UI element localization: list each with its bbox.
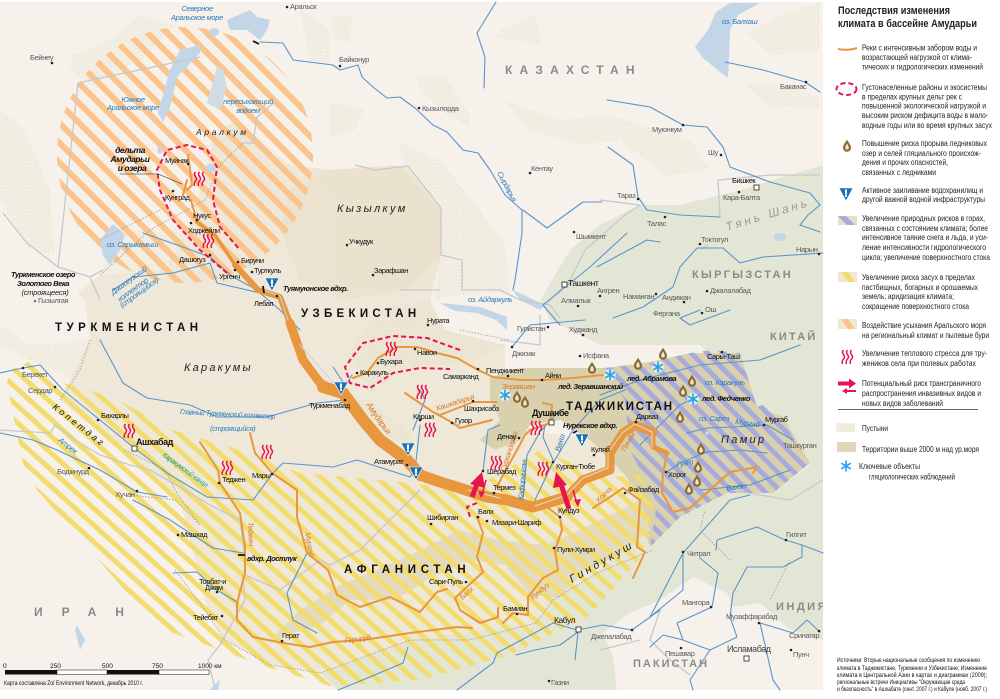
water labels: Мургаб [303,532,316,558]
icons: reservoir siltation shields [238,41,589,555]
sources note [837,656,987,693]
settlements: Байконур [339,55,369,64]
settlements: Ходжейли [188,226,220,235]
hatch: Aral shrinkage impact [57,27,313,283]
settlements: Гузор [455,416,472,425]
settlements: Душанбе [532,408,569,418]
scale bar: 500 [102,663,113,670]
settlements: Газни [551,678,569,687]
water labels: Вахш [553,432,567,453]
water labels: Герируд [344,633,371,645]
bold map notes: Амударьи [110,154,151,164]
country labels: ИРАН [34,605,143,619]
legend: stressed rivers [838,44,983,72]
Amu Darya basin lowland [60,120,653,673]
settlements: Джалалабад [710,286,752,295]
settlements: Герат [282,631,300,640]
country labels [34,63,828,670]
region and range labels: Аралкум [195,127,249,137]
settlements: Пунч [793,650,809,659]
legend title: климата в бассейне Амударьи [838,18,977,30]
settlements: Бухара [380,357,403,366]
settlements: Ургенч [219,272,240,281]
settlements: Гилгит [786,530,807,539]
water labels: Каракумский канал [161,450,211,490]
settlements: Термез [493,483,516,492]
water labels: Зеравшан [502,382,535,391]
settlements: Алмалык [561,296,591,305]
settlements: Андижан [662,293,691,302]
country labels: ТУРКМЕНИСТАН [55,322,203,334]
country labels: ПАКИСТАН [633,658,709,670]
settlements: Нурата [427,316,450,325]
scale bar: 1000 км [198,663,222,670]
legend title [838,5,977,30]
Tejen and Hari rivers [200,442,472,647]
water labels: оз. Балхаш [722,17,759,26]
Kyzylkum darker [280,165,441,300]
settlements: Тейебат [193,613,219,622]
legend: invasive spread: Потенциальный риск трансграничного [862,379,981,388]
icons: heat stress [124,172,549,476]
region and range labels: Памир [721,434,766,446]
invasive species arrows [470,472,581,509]
bold map notes: Нурекское вдхр. [563,421,617,430]
settlements: Кундуз [558,506,580,515]
water labels: Кашкадарья [435,392,475,413]
settlements: Худжанд [569,325,598,334]
water labels: Сырдарья [495,170,519,203]
settlements: Бишкек [732,176,756,185]
Zarafshan river [353,347,603,380]
settlements: Ташкент [568,278,599,288]
settlements: Фергана [653,309,681,318]
settlements: Зарафшан [374,266,408,275]
settlements: Музаффарабад [726,612,778,621]
settlements: Самарканд [443,372,479,381]
settlements: Шахрисабз [464,404,500,413]
settlements: Карши [413,412,434,421]
legend: Aral shrinkage [838,319,989,340]
scale bar: 250 [50,663,61,670]
settlements: Мазари-Шариф [492,518,541,527]
settlements: Атамурат [374,457,404,466]
water labels: Вахан [726,481,747,493]
settlements: Турткуль [254,266,281,275]
legend: glaciological sites: Ключевые объекты [859,462,920,471]
legend: stressed rivers: Реки с интенсивным забором воды и [862,44,977,52]
settlements: Сринагар [789,631,819,640]
icons: glaciological observation sites [499,361,699,405]
green-grey mountains [320,165,823,690]
water labels: Теджен [246,522,256,546]
settlements: Ош [705,305,716,314]
settlements: Боджнурд [57,467,90,476]
legend: populated deltas [836,83,992,130]
legend: invasive spread: новых видов заболеваний [862,399,943,408]
settlements: Джелалабад [591,632,632,641]
water labels: Кокча [594,485,613,504]
settlements: Кучан [116,490,135,499]
Amu Darya main stem [197,222,757,512]
region and range labels [51,127,811,586]
settlements: Курган-Тюбе [556,462,595,471]
legend: high terrain: Территории выше 2000 м над ур.моря [862,445,979,454]
legend title: Последствия изменения [838,5,950,17]
water labels: Аральское море [106,103,159,112]
legend: deserts: Пустыни [862,424,888,433]
water labels: Северное [181,4,213,13]
settlements: Исламабад [727,644,772,654]
stressed rivers [183,155,757,647]
water labels: (строящийся) [210,424,256,433]
lakes [75,3,786,690]
water labels: водоем [236,106,260,115]
water labels: Мургаб [735,417,761,430]
legend: invasive spread [838,378,981,408]
settlements: Шу [708,148,719,157]
country labels: КЫРГЫЗСТАН [692,269,793,281]
settlements: Пенджикент [486,366,525,375]
country labels: КАЗАХСТАН [505,63,642,77]
settlements: Бамиан [503,604,527,613]
scale bar: 0 [3,663,7,670]
settlements: Нукус [193,211,211,220]
water labels: Балх [458,584,476,602]
delta and densely populated risk zones [157,145,477,517]
Amu Darya delta outline [157,145,240,273]
legend: drought: пастбищных, богарных и орошаемых [862,283,978,292]
settlements: Кентау [531,164,553,173]
settlements: Сердар [28,386,52,395]
bold map notes: Золотого Века [17,279,69,288]
settlements: Мургаб [765,415,788,424]
legend: glacial lake outbursts: озер и селей гляциального происхож- [862,149,981,158]
settlements: Лебап [254,299,274,308]
settlements: Ташкурган [783,441,817,450]
hatch: mountain natural risks [604,350,807,545]
settlements: Нарын [796,245,818,254]
region and range labels: Каракумы [184,362,253,374]
region and range labels: Кызылкум [337,203,408,215]
water labels [56,4,761,645]
settlements: Гызылгая [38,296,69,305]
upper Amu Darya delta [183,155,197,222]
legend: heat stress: жеников села при полевых работах [862,359,976,368]
legend: stressed rivers: возрастающей нагрузкой от клима- [862,53,972,62]
Murgab river [250,433,447,612]
settlements: Талас [647,219,667,228]
legend: siltation [839,186,985,204]
settlements: Исфана [583,351,610,360]
Zarafshan basin outline [345,336,460,388]
legend: populated deltas: в пределах крупных дельт рек с [862,92,962,102]
water labels: Кундуз [529,580,551,602]
settlements: Муюнкум [652,125,682,134]
settlements: Сары-Таш [707,352,740,361]
water labels: оз. Сарыкамыш [107,240,159,249]
bold map notes [11,145,751,563]
settlements: Читрал [687,549,710,558]
water labels: коллектор [116,276,150,304]
legend: invasive spread: распространения инвазивных видов и [862,389,981,398]
legend: glacial lake outbursts: связанных с ледниками [862,168,936,177]
region and range labels: Тянь Шань [724,195,811,234]
bold map notes: вдхр. Достлук [247,554,298,563]
settlements: Балх [478,507,494,516]
bold map notes: лед. Зеравшанский [557,382,624,391]
legend: drought: земель; аридизация климата; [862,292,954,301]
settlements: Теджен [222,475,245,484]
country labels: КИТАЙ [770,330,818,343]
settlements: Бахарлы [101,411,129,420]
settlements: Хорог [668,470,687,479]
settlements [22,2,820,687]
state borders [0,57,823,685]
legend: glaciological sites [840,460,955,482]
bold map notes: лед. Федченко [701,394,751,403]
settlements: Кызылорда [422,104,460,113]
region and range labels: Копетдаг [51,402,108,449]
settlements: Ашхабад [136,437,174,447]
legend: mountain risks [838,214,990,262]
Kashkadarya and Guzar rivers [405,393,497,428]
settlements: Торбат-и [199,577,226,586]
settlements: Джам [205,583,223,592]
legend: drought: сокращение поверхностного стока [862,302,969,311]
water labels: Кафирниган [516,459,528,500]
settlements: Каракуль [360,368,389,377]
settlements: Сари-Пуль [429,577,463,586]
settlements: Бируни [241,256,264,265]
settlements: Баканас [780,82,807,91]
Surkhandarya and Dushanbe rivers [497,403,552,487]
settlements: Бейнеу [30,53,54,62]
legend: glaciological sites: гляциологических наблюдений [869,472,955,482]
settlements: Кара-Балта [723,193,761,202]
Balkh zone outline [467,503,477,517]
settlements: Шибирган [427,513,458,522]
bold map notes: и озера [118,163,147,173]
settlements: Пешавар [665,649,695,658]
settlements: Кунград [165,193,191,202]
settlements: Токтогул [701,235,728,244]
settlements: Дарваз [636,412,659,421]
water labels: Южное [121,95,145,104]
water labels: оз. Каракуль [705,378,745,387]
country labels: УЗБЕКИСТАН [301,308,421,320]
water labels: оз. Сарез [699,414,730,423]
water labels: Гунт [676,457,694,469]
settlements: Мары [252,471,270,480]
bold map notes: (строящееся) [21,288,69,297]
water labels: Атрек [56,435,80,456]
water labels: Аральское море [170,13,223,22]
settlements: Навои [417,348,437,357]
settlements: Гулистан [517,324,546,333]
settlements: Кабул [554,615,576,625]
settlements: Джизак [512,349,536,358]
settlements: Шымкент [576,232,607,241]
settlements: Куляб [591,445,610,454]
deserts [0,2,820,450]
country labels: АФГАНИСТАН [344,564,470,576]
scale bar [3,663,222,674]
settlements: Аральск [290,2,317,11]
Tajikistan high mountains [480,353,810,547]
map credit: Карта составлена Zoï Environment Network, декабрь 2010 г. [4,679,143,687]
settlements: Муйнак [165,156,189,165]
water labels: оз. Айдаркуль [468,295,513,304]
Hindu Kush high mountains [270,500,650,640]
water labels: Дашогузский [108,264,149,297]
legend: glacial lake outbursts [843,139,987,177]
settlements: Пули-Хумри [557,545,595,554]
settlements: Дашогуз [179,255,206,264]
legend: high terrain [837,442,979,454]
legend: drought: Увеличение риска засух в пределах [862,273,975,282]
settlements: Тараз [617,191,636,200]
Balkh river [455,517,498,623]
country labels: ИНДИЯ [776,601,828,613]
legend: deserts [836,423,888,433]
hatch: drought risk [0,340,660,690]
water labels: Главный Туркменский коллектор [180,407,275,421]
legend: glacial lake outbursts: дения и прочих опасностей, [862,158,948,167]
Kunduz river [503,507,562,623]
bold map notes: дельта [115,145,146,155]
country labels: ТАДЖИКИСТАН [566,401,674,413]
settlements: Ангрен [597,286,619,295]
settlements: Файзабад [628,485,660,494]
settlements: Наманган [623,292,654,301]
water labels: пересыхающий [223,97,274,106]
icons: glacial lake outburst drops [513,348,705,495]
bold map notes: лед. Абрамова [626,374,676,383]
Kokcha river [593,488,645,578]
settlements: Денау [497,432,517,441]
settlements: Машхад [181,530,208,539]
legend panel [836,5,992,482]
region and range labels: Гиндукуш [568,539,637,586]
settlements: Шерабад [487,467,517,476]
scale bar: 750 [152,663,163,670]
bold map notes: Туямуюнское вдхр. [283,284,348,293]
water labels: Пяндж [619,429,638,453]
water labels: Амударья [364,400,394,436]
settlements: Берекет [22,370,49,379]
settlements: Туркменабад [309,401,351,410]
settlements: Айни [545,371,561,380]
settlements: Учкудук [349,237,374,246]
bold map notes: Туркменское озеро [11,270,76,279]
water labels: Сурхандарья [498,430,520,473]
legend: heat stress [842,349,987,368]
water labels: (строящийся) [118,275,161,310]
legend: drought [838,272,978,311]
settlements: Мангора [682,598,710,607]
